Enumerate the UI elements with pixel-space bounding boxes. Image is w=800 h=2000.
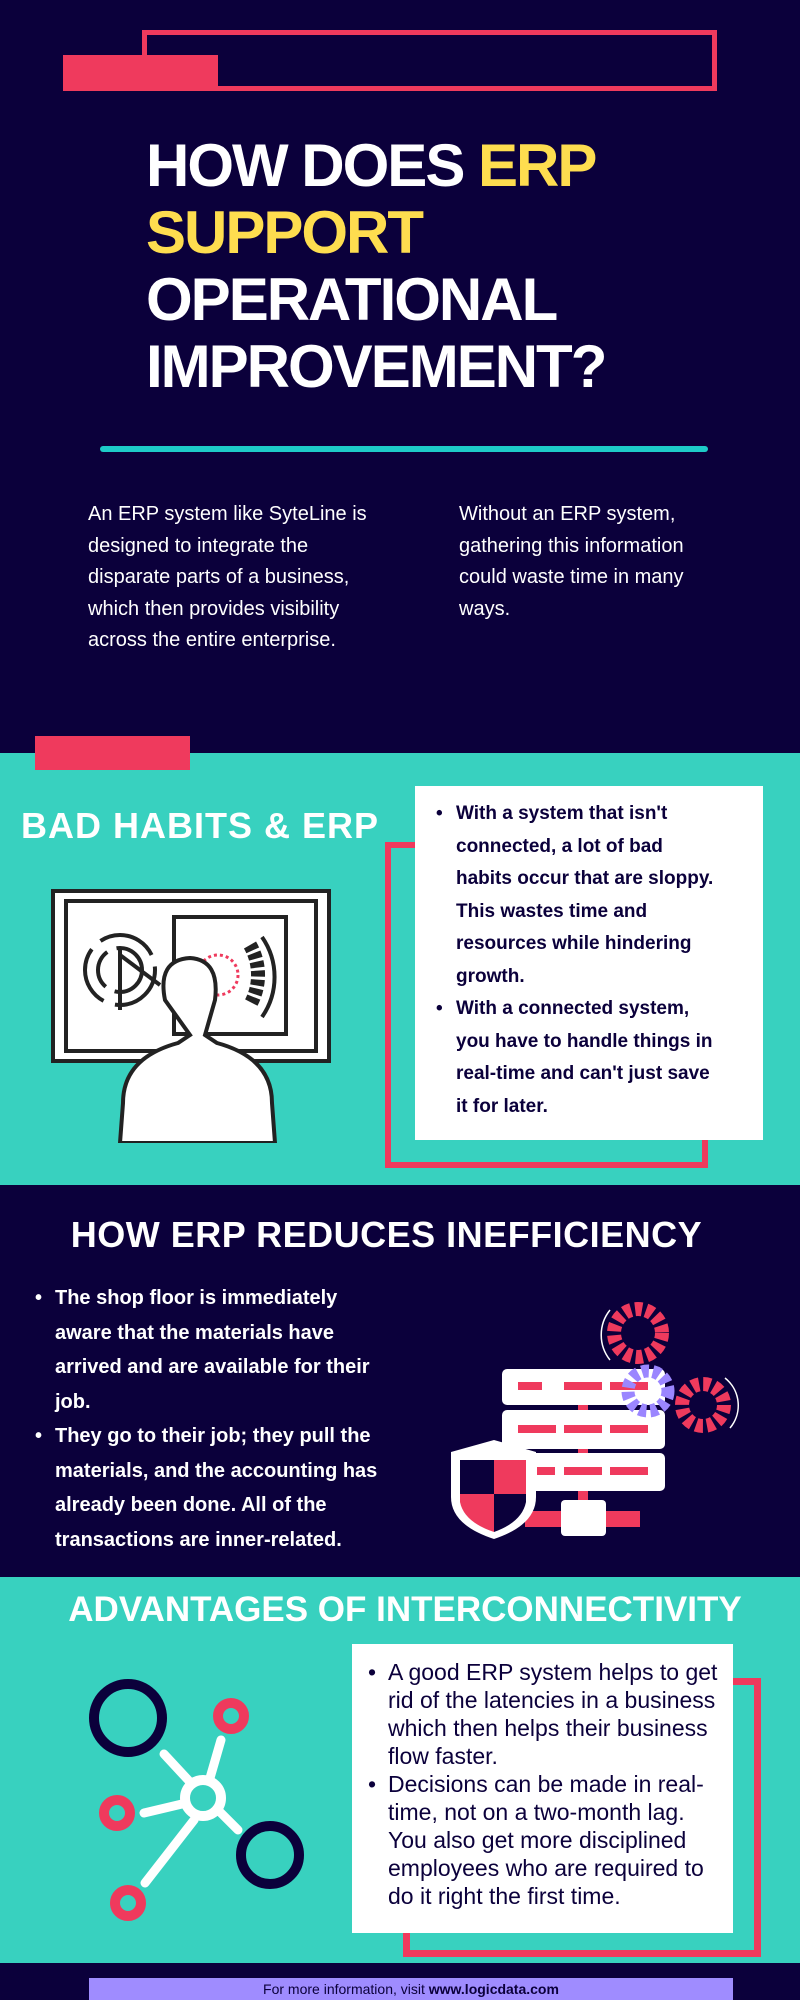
text box: do it right the first time. [388,1883,621,1909]
text box: connected, a lot of bad [456,836,663,856]
intro text left [88,503,367,651]
text box: With a system that isn't [456,803,667,824]
text box: habits occur that are sloppy. [456,868,713,889]
bullet text: materials, and the accounting has [55,1460,377,1482]
red frame [403,1678,761,1957]
intro text right [459,503,684,620]
decorative header frame [142,30,717,91]
bullet text: aware that the materials have [55,1322,334,1344]
heading: ADVANTAGES OF INTERCONNECTIVITY [68,1590,742,1629]
text box: growth. [456,966,525,986]
text box: You also get more disciplined [388,1827,686,1853]
text box: you have to handle things in [456,1030,713,1052]
red bar above bad habits [35,736,190,770]
text box [352,1644,733,1933]
text box [415,786,763,1140]
icon: network nodes [89,1679,304,1921]
icon: server with gears and shield [451,1302,739,1539]
text box: employees who are required to [388,1855,704,1881]
bullet text [36,1287,377,1550]
text box: rid of the latencies in a business [388,1687,715,1713]
red frame [385,842,708,1168]
text box: time, not on a two-month lag. [388,1799,685,1825]
intro text right: ways. [459,598,510,620]
teal divider [100,446,708,452]
title [146,132,605,400]
intro text right: Without an ERP system, [459,503,675,525]
text box: Decisions can be made in real- [388,1771,704,1797]
intro text left: disparate parts of a business, [88,566,349,588]
text box: This wastes time and [456,900,647,922]
header red bar [63,55,218,91]
heading: HOW ERP REDUCES INEFFICIENCY [71,1214,702,1255]
title: IMPROVEMENT? [146,333,605,400]
intro text right: could waste time in many [459,566,684,588]
text box: resources while hindering [456,933,691,954]
panel: advantages of interconnectivity [0,1577,800,1963]
title: HOW DOES ERP [146,132,595,199]
text box: it for later. [456,1096,548,1116]
intro text left: across the entire enterprise. [88,629,336,651]
intro text left: An ERP system like SyteLine is [88,503,367,525]
heading: bad habits: BAD HABITS & ERP [21,805,379,846]
intro text left: which then provides visibility [88,598,339,620]
illustration: person at monitor [51,889,331,1143]
footer bar: For more information, visit www.logicdata.com [263,1981,559,1997]
footer bar [89,1978,733,2000]
text box: With a connected system, [456,998,689,1019]
text box: flow faster. [388,1743,498,1769]
title: SUPPORT [146,199,422,266]
bullet text: already been done. All of the [55,1494,327,1516]
text box: A good ERP system helps to get [388,1659,717,1685]
bullet text: transactions are inner-related. [55,1528,342,1550]
panel: bad habits [0,753,800,1185]
title: OPERATIONAL [146,266,556,333]
bullet text: job. [55,1390,91,1412]
intro text right: gathering this information [459,534,684,556]
text box: which then helps their business [388,1715,708,1741]
bullet text: They go to their job; they pull the [55,1425,371,1447]
intro text left: designed to integrate the [88,534,308,556]
panel: how ERP reduces inefficiency [36,1214,739,1550]
bullet text: The shop floor is immediately [55,1287,337,1309]
bullet text: arrived and are available for their [55,1356,370,1378]
text box: real-time and can't just save [456,1063,710,1084]
